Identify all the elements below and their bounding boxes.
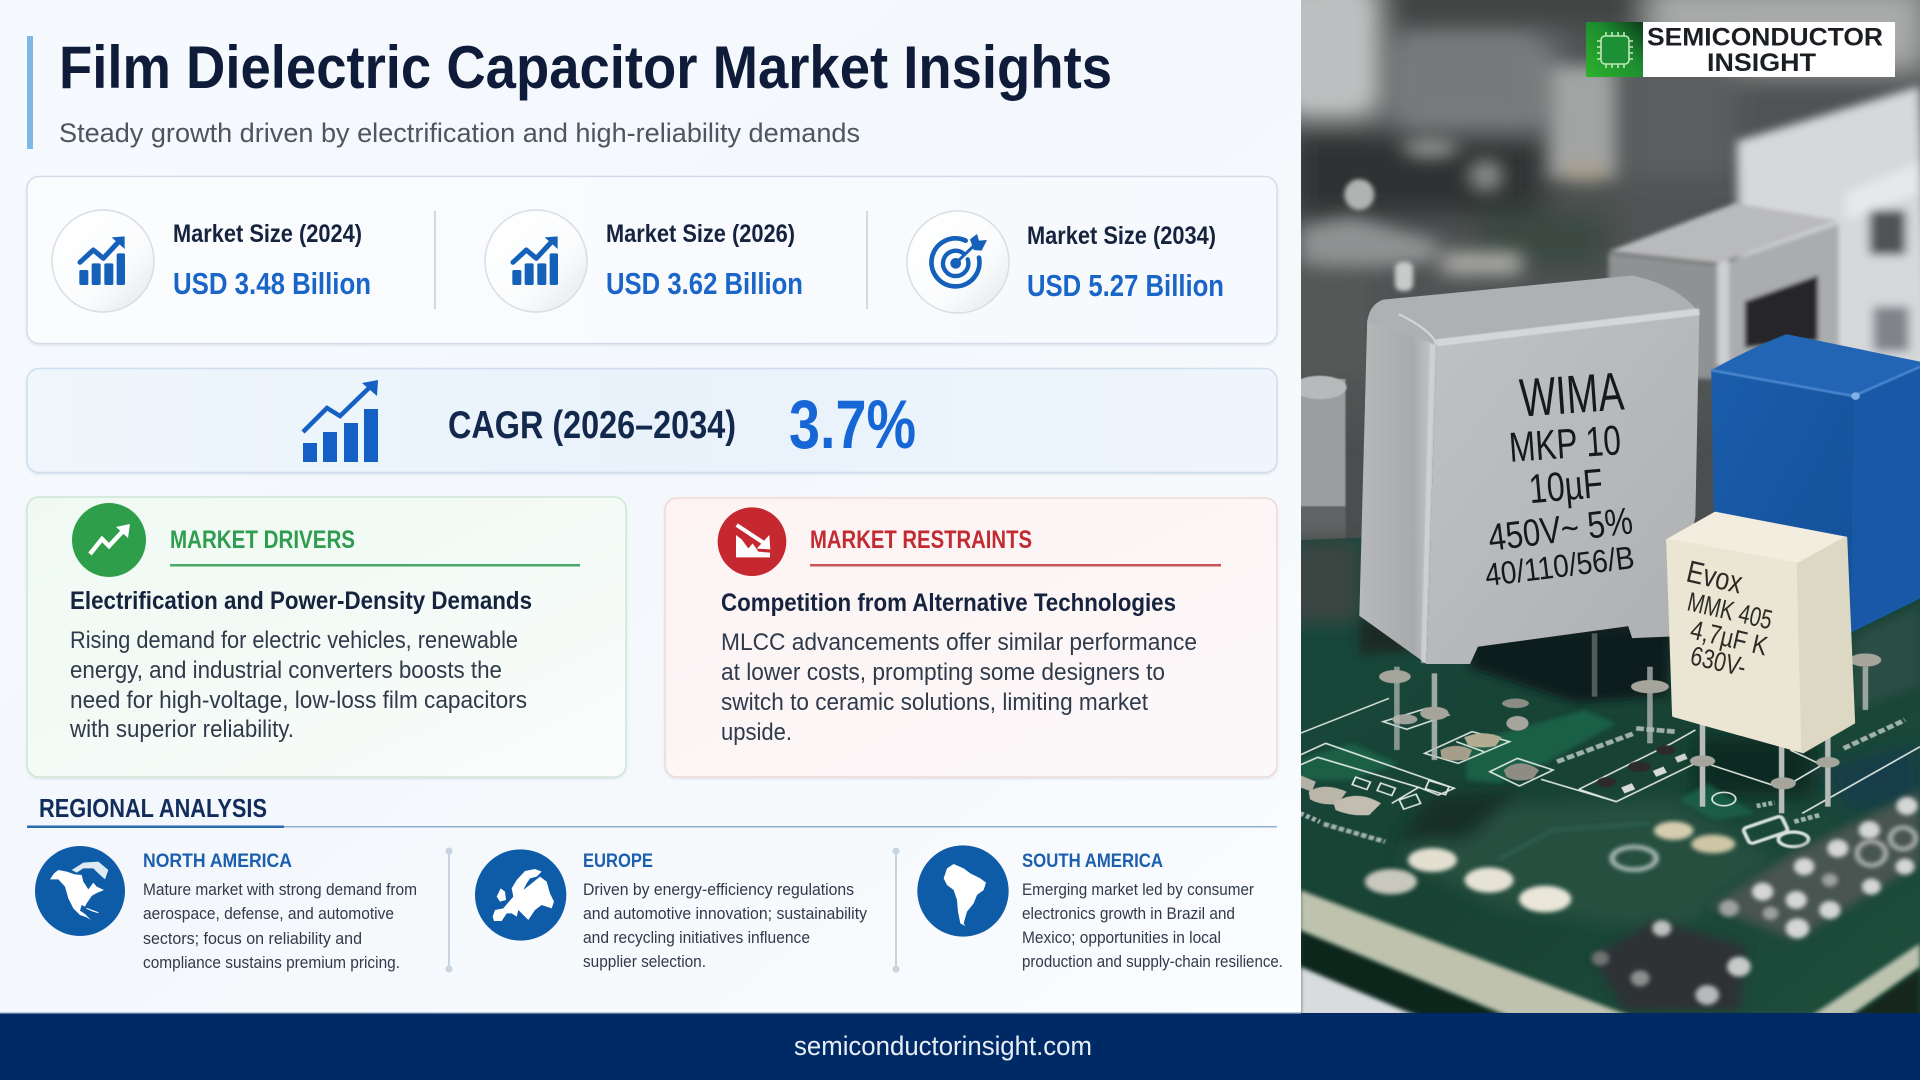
capacitor markings: Evox: 630V-	[1688, 641, 1749, 682]
driver description: need for high-voltage, low-loss film capacitors	[70, 687, 527, 714]
KPI: market size 2034: USD 5.27 Billion	[1027, 268, 1224, 303]
region: South America: SOUTH AMERICA	[1022, 851, 1163, 872]
region: North America: sectors; focus on reliability and	[143, 929, 362, 948]
driver description: energy, and industrial converters boosts the	[70, 657, 502, 684]
footer bar: semiconductorinsight.com	[794, 1031, 1092, 1061]
panel: market restraints	[665, 498, 1277, 777]
KPI: market size 2034	[907, 211, 1224, 313]
region: Europe: supplier selection.	[583, 952, 706, 971]
board tone patches	[1399, 737, 1920, 933]
blurred background components	[1276, 0, 1920, 541]
region: North America: NORTH AMERICA	[143, 851, 292, 872]
circuit board details	[1300, 633, 1920, 1017]
panel: CAGR: 3.7%	[789, 386, 916, 463]
logo: Semiconductor Insight: SEMICONDUCTOR	[1647, 24, 1883, 52]
icon: growth chart	[512, 236, 558, 285]
silkscreen reference marks	[1300, 720, 1905, 842]
panel: market restraints: MARKET RESTRAINTS	[810, 526, 1032, 554]
left content background	[0, 0, 1302, 1014]
icon: South America globe	[917, 845, 1009, 937]
capacitor markings: Evox: 4,7µF K	[1688, 615, 1770, 661]
driver description	[69, 627, 527, 743]
region: North America: compliance sustains premium pricing.	[143, 953, 400, 972]
icon: chip	[1597, 32, 1633, 68]
driver description: with superior reliability.	[69, 716, 294, 743]
region: North America: aerospace, defense, and automotive	[143, 904, 394, 923]
region: North America: Mature market with strong demand from	[143, 880, 417, 899]
restraint description: upside.	[721, 719, 792, 746]
capacitor markings: WIMA: WIMA	[1518, 361, 1626, 429]
region: South America: electronics growth in Brazil and	[1022, 904, 1235, 923]
region: Europe: and automotive innovation; sustainability	[583, 904, 867, 923]
KPI: market size 2026: Market Size (2026)	[606, 220, 795, 248]
region: Europe	[475, 849, 867, 971]
region: South America: Emerging market led by consumer	[1022, 880, 1254, 899]
panel: market size KPIs	[27, 176, 1277, 344]
capacitor markings: Evox: Evox	[1683, 554, 1746, 601]
silver capacitor body	[1359, 276, 1699, 664]
capacitor markings: WIMA: 450V~ 5%	[1486, 500, 1635, 560]
out-of-focus pads	[1365, 821, 1735, 912]
region: South America: production and supply-chain resilience.	[1022, 952, 1283, 971]
restraint description: MLCC advancements offer similar performance	[721, 629, 1197, 656]
restraint description: switch to ceramic solutions, limiting market	[721, 689, 1148, 716]
KPI: market size 2026	[485, 210, 803, 312]
panel: market restraints: Competition from Alternative Technologies	[721, 589, 1176, 617]
footer bar	[0, 1012, 1920, 1080]
KPI: market size 2024: USD 3.48 Billion	[173, 266, 371, 301]
blue capacitor body	[1711, 334, 1920, 633]
KPI: market size 2034: Market Size (2034)	[1027, 222, 1216, 250]
region: South America	[917, 845, 1283, 971]
region: Europe: EUROPE	[583, 851, 653, 872]
logo: Semiconductor Insight	[1586, 22, 1895, 77]
panel: market drivers: MARKET DRIVERS	[170, 526, 355, 554]
capacitor markings: WIMA	[1486, 373, 1634, 585]
panel: market drivers	[27, 497, 626, 777]
region: South America: Mexico; opportunities in local	[1022, 928, 1221, 947]
icon: Europe globe	[475, 849, 566, 941]
icon: target	[931, 234, 987, 286]
panel: market drivers: Electrification and Power-Density Demands	[70, 587, 532, 615]
restraint description: at lower costs, prompting some designers to	[721, 659, 1165, 686]
title block	[27, 34, 1112, 149]
capacitor markings: Evox: MMK 405	[1685, 587, 1775, 635]
KPI: market size 2024: Market Size (2024)	[173, 220, 362, 248]
capacitor markings: WIMA: 40/110/56/B	[1483, 539, 1636, 593]
solder pads and chips	[1300, 699, 1688, 815]
capacitor pins	[1397, 633, 1865, 813]
icon: rising bars	[303, 380, 378, 462]
panel: CAGR: CAGR (2026–2034)	[448, 404, 736, 447]
KPI: market size 2026: USD 3.62 Billion	[606, 266, 803, 301]
regional analysis heading: REGIONAL ANALYSIS	[39, 793, 267, 823]
icon: growth chart	[79, 236, 125, 285]
icon: red decline arrow	[718, 507, 786, 576]
region: Europe: and recycling initiatives influence	[583, 928, 810, 947]
title: Film Dielectric Capacitor Market Insights	[59, 34, 1112, 101]
solder joint field	[1592, 790, 1920, 1010]
icon: green trend arrow	[72, 503, 146, 577]
driver description: Rising demand for electric vehicles, renewable	[70, 627, 518, 654]
cream capacitor body	[1668, 513, 1854, 752]
subtitle: Steady growth driven by electrification and high-reliability demands	[59, 118, 860, 148]
capacitor markings: WIMA: 10µF	[1527, 460, 1605, 512]
region: Europe: Driven by energy-efficiency regulations	[583, 880, 854, 899]
region divider decorative	[446, 848, 900, 972]
capacitor markings: WIMA: MKP 10	[1507, 416, 1622, 471]
panel: CAGR	[27, 368, 1277, 472]
board edge strips	[1300, 890, 1920, 1017]
photo: film capacitors on a circuit board	[1276, 0, 1920, 1017]
board silkscreen	[1300, 698, 1920, 813]
KPI: market size 2024	[52, 210, 371, 312]
restraint description	[721, 629, 1197, 746]
logo: Semiconductor Insight: INSIGHT	[1707, 49, 1816, 77]
circuit board base	[1284, 517, 1920, 1016]
icon: North America globe	[35, 846, 125, 936]
region: North America	[35, 846, 417, 972]
capacitor markings: Evox	[1687, 560, 1772, 674]
